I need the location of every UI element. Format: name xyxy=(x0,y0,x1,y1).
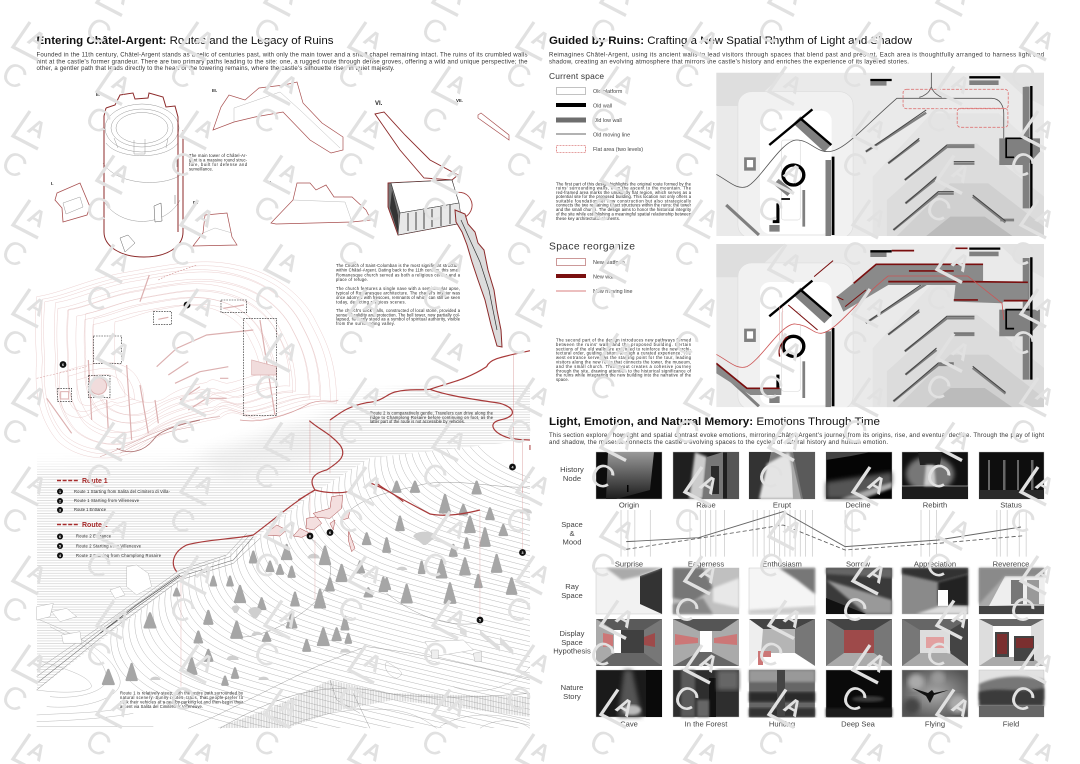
row: history labels: Raise xyxy=(696,500,716,510)
legend: space reorganize: New wall xyxy=(593,274,615,280)
row: history labels: Status xyxy=(1000,500,1022,510)
photo: In the Forest xyxy=(673,670,739,717)
text: current space note: potential site for the proposed building. This location not only offers a xyxy=(556,194,692,199)
legend route 2: 5 xyxy=(59,544,61,548)
panel: guided by ruins xyxy=(549,35,1044,410)
text: current space note: ruins' surrounding walls, from the ascent to the mountain. The xyxy=(556,186,692,190)
photo: Status xyxy=(979,452,1044,499)
text: route 2 note: latter part of the route is not accessible by vehicles. xyxy=(370,419,465,424)
legend route 1: Route 1 xyxy=(82,478,108,485)
row labels: Space xyxy=(561,591,583,600)
row: history node photos xyxy=(596,452,1044,499)
ruin I xyxy=(51,181,90,222)
ruin V: V. xyxy=(268,180,272,185)
intro paragraph: This section explores how light and spatial contrast evoke emotions, mirroring Châtel-Argent's journey from its origins, rise, and eventual decline. Through the play of light xyxy=(549,433,1044,439)
tower description: gent is a massive round struc- xyxy=(189,158,248,162)
tower description xyxy=(189,153,248,172)
panel: light, emotion and natural memory xyxy=(549,416,1044,728)
text: current space note: these key architectural elements. xyxy=(556,216,620,221)
row labels: Display xyxy=(560,629,585,638)
legend route 2: Route 2 Starting from Champlong Rosaire xyxy=(76,553,162,558)
tower description: ture, built for defense and xyxy=(189,162,248,167)
ruin III xyxy=(212,82,343,153)
render: ray 2 xyxy=(673,568,739,614)
ruin III: III. xyxy=(212,88,217,93)
render: ray 4 xyxy=(826,568,892,614)
tower description: surveillance. xyxy=(189,166,213,172)
row labels: History xyxy=(560,465,584,474)
row labels: Space xyxy=(561,638,583,647)
row: history labels: Decline xyxy=(845,500,871,510)
legend: current space: Flat area (two levels) xyxy=(593,147,643,153)
text: current space note: red-framed area marks the unusually flat region, which serves as a xyxy=(556,190,692,195)
legend: space reorganize xyxy=(556,258,633,295)
room 6 xyxy=(979,619,1044,666)
text: reorganize note: sections of the old walls are extended to reinforce the new archi- xyxy=(556,346,692,352)
legend route 1: Route 1 Entrance xyxy=(74,507,107,512)
text: route 2 note: Route 2 is comparatively gentle. Travelers can drive along the xyxy=(370,410,494,416)
legend: routes xyxy=(57,478,171,558)
legend route 1: 2 xyxy=(59,499,61,503)
row labels: Node xyxy=(563,474,581,483)
church description: lapsed, formerly stood as a symbol of spiritual authority, visible xyxy=(336,316,461,322)
row labels xyxy=(553,465,591,701)
church description: The church features a single nave with a semicircular apse, xyxy=(336,286,460,291)
intro paragraph: and shadow, the museum connects the castle's evolving spaces to the cycles of natural history and human emotion. xyxy=(549,440,888,446)
photo: Deep Sea xyxy=(826,670,892,717)
legend route 1: Route 1 Starting from Salita del Cimitero di Villa- xyxy=(74,489,171,494)
row: mood labels: Sorrow xyxy=(846,560,871,568)
intro paragraph: hint at the castle's former grandeur. There are two primary paths leading to the site: one, a rugged route through dense groves, offering a wild and unique perspective; the xyxy=(36,59,528,65)
legend: space reorganize: New platform xyxy=(593,260,625,266)
dashed focus boxes xyxy=(58,300,277,416)
legend: current space: Old wall xyxy=(593,104,612,110)
legend route 1: 1 xyxy=(59,490,61,494)
row labels: Mood xyxy=(562,538,582,546)
intro paragraph: Reimagines Châtel-Argent, using its ancient walls to lead visitors through spaces that blend past and present. Each area is thoughtfully arranged to harness light and xyxy=(549,52,1044,58)
title: Entering Châtel-Argent: Entering Châtel-Argent: Routes and the Legacy of Ruins xyxy=(36,35,334,47)
row labels: & xyxy=(569,529,575,538)
row: nature labels: Field xyxy=(1003,720,1019,728)
ruin VI: church and walls: VI. xyxy=(375,101,383,107)
chart dashed mood line xyxy=(626,525,1024,550)
ruin VII: VII. xyxy=(456,98,463,103)
room 5 xyxy=(902,619,968,666)
text: reorganize note: and the small church. This layout creates a cohesive journey xyxy=(556,364,692,369)
route markers: 6 xyxy=(309,534,311,538)
photo: Raise xyxy=(673,452,739,499)
text: route 1 note: Route 1 is relatively steep, with the entire path surrounded by xyxy=(120,690,244,696)
church description: typical of Romanesque architecture. The chapel's interior was xyxy=(336,290,460,296)
intro paragraph xyxy=(36,52,528,72)
hatched retaining band xyxy=(217,680,530,728)
legend: current space: Old platform xyxy=(593,89,623,95)
panel: entering Châtel-Argent xyxy=(35,36,532,728)
text: reorganize note: space. xyxy=(556,377,569,382)
plans: current and reorganized xyxy=(716,73,1044,410)
intro paragraph xyxy=(549,52,1044,65)
route markers: 4 xyxy=(512,465,514,469)
text: reorganize note: The second part of the design introduces new pathways formed xyxy=(556,338,692,342)
legend route 2: 6 xyxy=(59,535,61,539)
legend route 2: Route 2 xyxy=(82,522,108,529)
row: mood labels: Reverence xyxy=(993,560,1029,568)
legend: current space xyxy=(556,88,643,153)
terrain: axonometric landscape with contours xyxy=(36,386,532,728)
text: route 1 note xyxy=(120,690,244,709)
intro paragraph xyxy=(549,433,1044,446)
ruin VII xyxy=(456,98,509,140)
route markers: 3 xyxy=(522,551,524,555)
row: mood labels: Enthusiasm xyxy=(762,560,802,568)
photo: Erupt xyxy=(749,452,815,499)
title: Guided by Ruins: Guided by Ruins: Crafting a New Spatial Rhythm of Light and Shadow xyxy=(549,35,912,47)
room 1 xyxy=(596,619,662,666)
intro paragraph: Founded in the 11th century, Châtel-Argent stands as a relic of centuries past, with only the main tower and a small chapel remaining intact. The ruins of its crumbled walls xyxy=(36,52,528,58)
church description: place of refuge. xyxy=(336,277,368,282)
text: reorganize note: the ruins while integrating the new building into the narrative of the xyxy=(556,372,692,378)
site plan: pink contour map xyxy=(35,262,338,458)
tower description: The main tower of Châtel-Ar- xyxy=(189,153,248,158)
new platform band xyxy=(837,265,1028,312)
old moving line xyxy=(716,98,1004,187)
chart solid mood line xyxy=(626,512,1021,547)
new walls xyxy=(716,248,1028,388)
ruin IV xyxy=(193,200,237,246)
plan: current space xyxy=(716,73,1044,238)
row: history labels: Erupt xyxy=(773,500,792,510)
row: history labels: Rebirth xyxy=(923,500,947,510)
text: reorganize note: between the ruins' walls and the proposed building. Certain xyxy=(556,342,692,347)
row: mood labels: Appreciation xyxy=(914,560,956,568)
text: current space note: suitable foundation for new construction but also strategically xyxy=(556,198,692,204)
photo: Flying xyxy=(902,670,968,717)
legend route 1 xyxy=(57,478,171,513)
render: ray 3 xyxy=(749,568,815,614)
row: history labels: Origin xyxy=(619,500,639,510)
render: ray 1 xyxy=(596,568,662,614)
row labels: Story xyxy=(563,692,581,701)
intro paragraph: shadow, creating an evolving atmosphere that mirrors the castle's history and enriches the experience of its layered stories. xyxy=(549,59,909,65)
row labels: Nature xyxy=(561,683,583,692)
text: current space note: connects the two remaining intact structures within the ruins: the tower xyxy=(556,202,692,208)
legend route 2: 4 xyxy=(59,554,61,558)
legend: space reorganize: New moving line xyxy=(593,289,633,295)
legend route 2: Route 2 Starting from Villeneuve xyxy=(76,544,142,548)
row labels: Space xyxy=(561,520,583,529)
photo: Field xyxy=(979,670,1044,717)
church description: The church's thick walls, constructed of local stone, provided a xyxy=(336,308,461,313)
photo: Cave xyxy=(596,670,662,717)
ruin I: I. xyxy=(51,181,54,186)
text: current space note: of the site while establishing a meaningful spatial relationship between xyxy=(556,212,692,216)
heading: space reorganize: Space reorganize xyxy=(549,242,635,252)
ruin V xyxy=(268,180,371,224)
castle footprint on terrain xyxy=(265,495,355,552)
title: Light, Emotion: Light, Emotion, and Natural Memory: Emotions Through Time xyxy=(549,416,880,428)
white village blocks xyxy=(37,565,513,662)
text: current space note xyxy=(556,182,692,221)
legend: current space: Old moving line xyxy=(593,132,630,138)
row: nature labels xyxy=(620,720,1019,728)
row: mood labels xyxy=(615,560,1029,568)
legend route 2 xyxy=(57,522,162,558)
text: current space note: and the small church. The design aims to honor the historical integrity xyxy=(556,207,692,212)
church description: from the surrounding valley. xyxy=(336,321,395,326)
route markers: 5 xyxy=(479,618,481,622)
route markers: 5 xyxy=(186,303,188,307)
chart rhythm bars xyxy=(621,510,1026,557)
row: nature labels: Cave xyxy=(620,720,638,728)
row: ray space renders xyxy=(596,568,1044,614)
text: reorganize note: west entrance serves as the starting point for the tour, leading xyxy=(556,355,692,360)
row: nature labels: Hunting xyxy=(769,720,795,728)
row: mood labels: Surprise xyxy=(615,560,643,568)
church description xyxy=(336,263,461,326)
text: reorganize note: visitors along the new route that connects the tower, the museum, xyxy=(556,360,691,364)
text: route 1 note: natural scenery. Sunny routes, trails, that people prefer to xyxy=(120,695,244,700)
row: history labels xyxy=(619,500,1022,510)
row: nature labels: In the Forest xyxy=(685,720,728,728)
church description: sense of solidity and protection. The bell tower, now partially col- xyxy=(336,312,461,318)
text: route 2 note: ridge to Champlong Rosaire before continuing on foot, as the xyxy=(370,415,494,420)
legend: current space: Old low wall xyxy=(593,118,622,124)
plan: reorganized space xyxy=(716,244,1044,410)
row: nature labels: Deep Sea xyxy=(841,720,876,728)
row: nature story photos xyxy=(596,670,1044,717)
room 3 xyxy=(749,619,815,666)
ruin IV: IV. xyxy=(193,200,198,205)
text: reorganize note xyxy=(556,338,692,382)
photo: Rebirth xyxy=(902,452,968,499)
route markers: 6 xyxy=(62,363,64,367)
photo: Origin xyxy=(596,452,662,499)
flat area dashed outline xyxy=(903,89,1008,127)
church description: once adorned with frescoes, remnants of which can still be seen xyxy=(336,295,461,300)
photo: Hunting xyxy=(749,670,815,717)
legend route 2: Route 2 Entrance xyxy=(76,534,112,538)
photo: Decline xyxy=(826,452,892,499)
row: display space hypothesis xyxy=(596,619,1044,666)
row: nature labels: Flying xyxy=(925,720,945,728)
ruin VI: church and walls xyxy=(375,101,502,347)
text: route 1 note: park their vehicles at a nearby parking lot and then begin their xyxy=(120,700,244,704)
contour lines xyxy=(35,262,338,458)
ruin footprints xyxy=(47,275,277,440)
render: ray 6 xyxy=(979,568,1044,614)
church description: The Church of Saint-Colomban is the most significant structure xyxy=(336,263,461,268)
new moving line xyxy=(716,276,1004,367)
text: reorganize note: tectural order, guiding visitors through a curated experience. The xyxy=(556,350,692,356)
row labels: Ray xyxy=(565,582,579,591)
trees xyxy=(103,482,532,685)
row labels: Hypothesis xyxy=(553,646,591,656)
row: mood labels: Eagerness xyxy=(688,560,724,568)
church description: today, depicting religious scenes. xyxy=(336,300,406,304)
route markers xyxy=(60,302,526,623)
legend route 1: Route 1 Starting from Villeneuve xyxy=(74,498,140,503)
church description: within Châtel-Argent. Dating back to the 11th century, this small xyxy=(336,268,460,272)
routes: red paths on terrain xyxy=(173,351,530,687)
text: route 1 note: ascent via Salita del Cimitero or Villeneuve. xyxy=(120,704,203,709)
route markers: 6 xyxy=(329,531,331,535)
render: ray 5 xyxy=(902,568,968,614)
text: current space note: The first part of this design highlights the original route formed by the xyxy=(556,182,692,186)
chart: space and mood xyxy=(621,510,1026,557)
heading: current space: Current space xyxy=(549,71,604,81)
church description: Romanesque church served as both a religious center and a xyxy=(336,272,461,278)
intro paragraph: other, a gentler path that leads directly to the heart of the towering remains, where the castle's silhouette rises in quiet majesty. xyxy=(36,66,395,72)
ruin II: main tower xyxy=(96,92,183,257)
old walls xyxy=(726,83,1026,236)
room 2 xyxy=(673,619,739,666)
legend route 1: 3 xyxy=(59,508,61,512)
ruin II: main tower: II. xyxy=(96,92,100,97)
room 4 xyxy=(826,619,892,666)
text: reorganize note: through the site, drawing attention to the historical significance of xyxy=(556,368,692,374)
text: route 2 note xyxy=(370,410,494,424)
